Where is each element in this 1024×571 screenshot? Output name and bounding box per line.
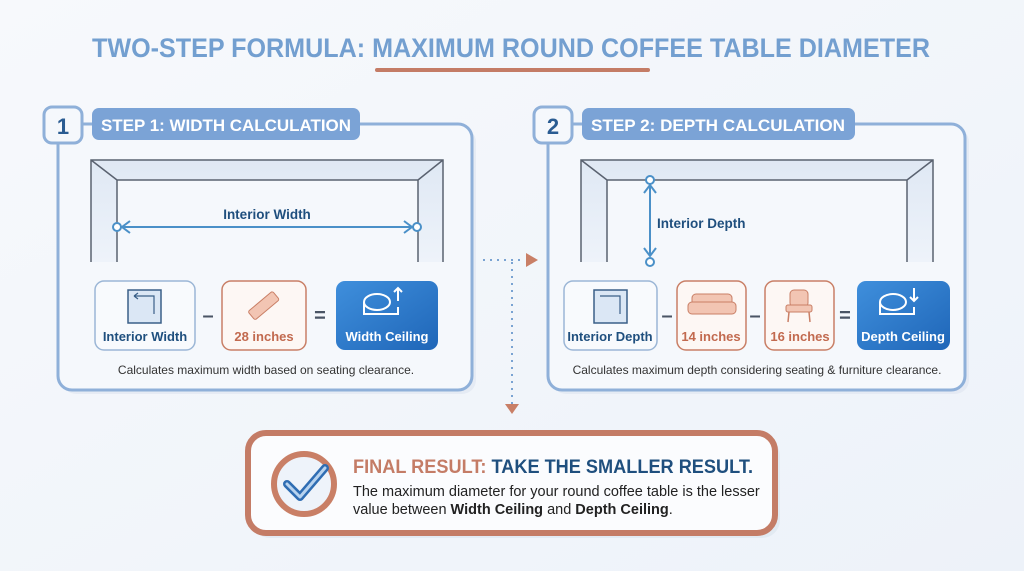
room diagram width: Interior Width [223,207,311,222]
equals: = [314,305,326,327]
caption step 2: Calculates maximum depth considering seating & furniture clearance. [573,363,941,377]
room diagram width [91,160,443,262]
box: 14 inches sofa: 14 inches [681,329,741,344]
title: TWO-STEP FORMULA: MAXIMUM ROUND COFFEE TABLE DIAMETER [92,33,930,63]
box: interior width: Interior Width [103,329,187,344]
badge 2 [534,107,572,143]
box: interior width [95,281,195,350]
box: width ceiling [336,281,438,350]
minus: – [202,305,214,327]
final heading: FINAL RESULT: TAKE THE SMALLER RESULT. [353,457,753,478]
box: 28 inches: 28 inches [234,329,294,344]
step 2 heading: STEP 2: DEPTH CALCULATION [591,116,845,135]
badge 1: 1 [57,114,69,139]
box: 16 inches chair: 16 inches [770,329,830,344]
room diagram depth [581,160,933,266]
panel: final result [248,433,780,538]
badge 2: 2 [547,114,559,139]
minus: – [661,305,673,327]
box: interior depth [564,281,657,350]
step 2 heading [582,108,855,140]
box: 16 inches chair [765,281,834,350]
panel: step 1 [44,107,476,394]
box: depth ceiling [857,281,950,350]
final body: value between Width Ceiling and Depth Ceiling. [353,502,673,518]
box: width ceiling: Width Ceiling [346,329,429,344]
box: interior depth: Interior Depth [567,329,653,344]
minus: – [749,305,761,327]
step 1 heading: STEP 1: WIDTH CALCULATION [101,116,351,135]
room diagram depth: Interior Depth [657,216,746,231]
panel: step 2 [534,107,969,394]
final body: The maximum diameter for your round coffee table is the lesser [353,484,760,500]
step 1 heading [92,108,360,140]
box: depth ceiling: Depth Ceiling [861,329,945,344]
box: 28 inches [222,281,306,350]
arrow: connector [483,253,538,414]
caption step 1: Calculates maximum width based on seating clearance. [118,363,414,377]
equals: = [839,305,851,327]
badge 1 [44,107,82,143]
box: 14 inches sofa [677,281,746,350]
icon: check [274,454,334,514]
